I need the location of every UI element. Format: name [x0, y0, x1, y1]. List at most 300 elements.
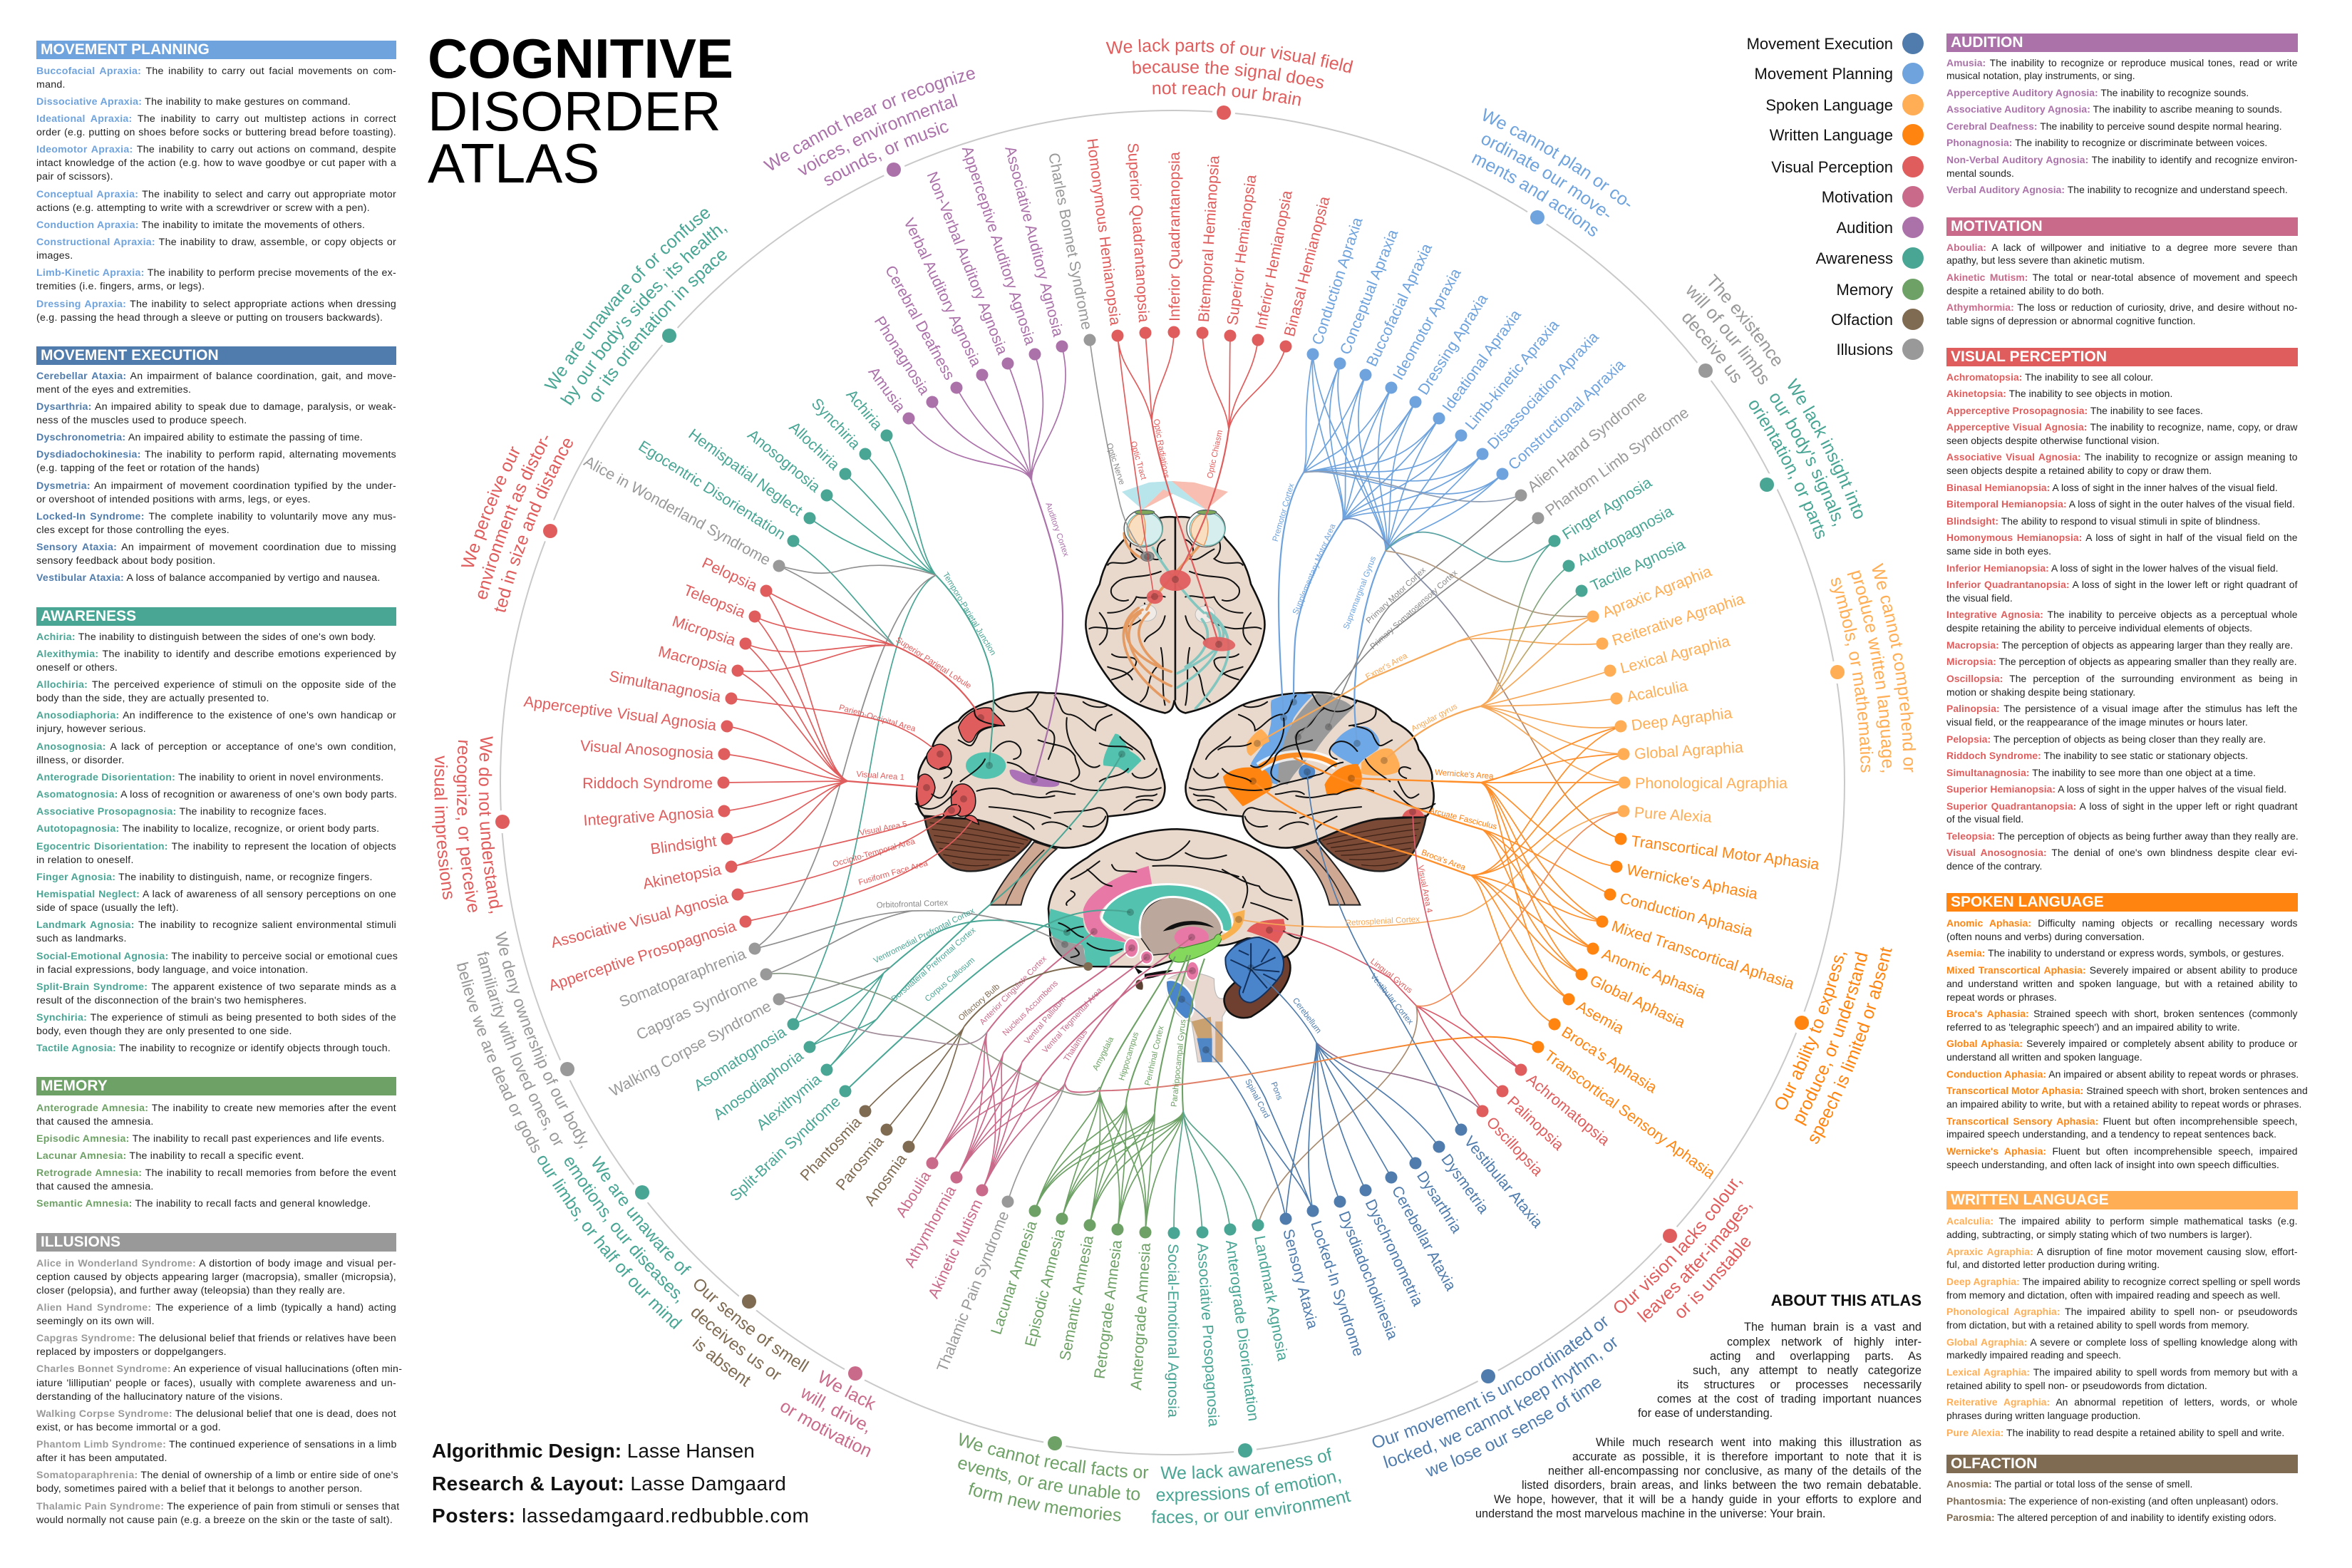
- panel: awareness: Split-Brain Syndrome: The apparent existence of two separate minds as a: [36, 981, 396, 993]
- about text block: complex network of highly inter-: [1727, 1336, 1922, 1348]
- panel: visual perception: same side in both eyes.: [1946, 545, 2051, 557]
- panel: visual perception: Homonymous Hemianopsia: A loss of sight in half of the visual field on the: [1946, 532, 2298, 543]
- panel: written language: Reiterative Agraphia: An abnormal repetition of letters, words, or whole: [1946, 1396, 2298, 1408]
- panel: motivation: Aboulia: A lack of willpower and initiative to a degree more severe than: [1946, 242, 2298, 253]
- statement: vision: or is unstable: [1676, 1237, 1750, 1318]
- panel: visual perception: Integrative Agnosia: The inability to perceive objects as a perceptual whole: [1946, 609, 2298, 620]
- statement: body insight: our body's signals,: [1770, 393, 1842, 526]
- disorder nodes: body agnosias: Autotopagnosia: [1574, 502, 1676, 569]
- disorder nodes: body agnosias: [1545, 474, 1688, 602]
- statement: written language: [1826, 562, 1919, 774]
- panel: audition: Associative Auditory Agnosia: The inability to ascribe meaning to sounds.: [1946, 103, 2282, 115]
- disorder nodes: delusions: Capgras Syndrome: [634, 971, 760, 1043]
- panel: memory: that caused the amnesia.: [36, 1181, 154, 1192]
- brain area labels: Ventral Tegmental Area: [1041, 986, 1104, 1055]
- statement: visual field: because the signal does: [1133, 61, 1324, 88]
- panel: written language: Global Agraphia: A severe or complete loss of spelling knowledge along with: [1946, 1336, 2297, 1348]
- panel: awareness: AWARENESS: [41, 608, 136, 624]
- statement: audition: sounds, or music: [820, 116, 951, 190]
- panel: audition: Phonagnosia: The inability to recognize or discriminate between voices.: [1946, 137, 2267, 148]
- disorder nodes: spatial awareness: Allochiria: [786, 418, 843, 473]
- panel: written language: WRITTEN LANGUAGE: [1951, 1192, 2109, 1208]
- disorder nodes: movement execution: [1275, 1120, 1546, 1358]
- panel: memory: MEMORY: [41, 1078, 108, 1094]
- brain area labels: Dorsolateral Prefrontal Cortex: [890, 926, 978, 1004]
- panel: movement execution: MOVEMENT EXECUTION: [41, 346, 219, 363]
- panel: illusions: Walking Corpse Syndrome: The delusional belief that one is dead, does not: [36, 1408, 396, 1420]
- brain area labels: Superior Parietal Lobule: [894, 636, 973, 691]
- panel: movement execution: Dysmetria: An impairment of movement coordination typified by the under-: [36, 480, 396, 492]
- panel: movement execution: ment of the eyes and extremities.: [36, 384, 191, 396]
- statement: awareness of emotion: expressions of emotion,: [1156, 1473, 1341, 1505]
- panel: awareness: Anosodiaphoria: An indifference to the existence of one's own handicap or: [36, 710, 396, 721]
- panel: memory: Lacunar Amnesia: The inability to recall a specific event.: [36, 1150, 304, 1162]
- panel: awareness: illness, or disorder.: [36, 755, 125, 766]
- panel: movement execution: [36, 346, 396, 589]
- panel: awareness: injury, however serious.: [36, 723, 146, 735]
- panel: audition: Apperceptive Auditory Agnosia: The inability to recognize sounds.: [1946, 87, 2249, 98]
- statement: delusions: familiarity with loved ones, or: [473, 949, 569, 1150]
- disorder nodes: left visual: Micropsia: [670, 612, 738, 649]
- brain area labels: [832, 418, 1498, 1120]
- legend: Motivation: [1822, 188, 1893, 206]
- brain area labels: Exner's Area: [1364, 651, 1409, 681]
- brain area labels: Optic Nerve: [1105, 442, 1126, 486]
- brain: lateral right: [1185, 692, 1435, 905]
- disorder nodes: apraxias: Constructional Apraxia: [1505, 356, 1629, 473]
- panel: awareness: body than the side, they are actually presented to.: [36, 693, 269, 704]
- brain area labels: Ventromedial Prefrontal Cortex: [872, 907, 976, 965]
- brain area labels: Visual Area 4: [1416, 865, 1433, 914]
- panel: audition: musical notation, play instruments, or sing.: [1946, 70, 2135, 81]
- statement: visual impressions: visual impressions: [430, 755, 459, 901]
- panel: awareness: in facial expressions, body language, and voice intonation.: [36, 964, 309, 976]
- panel: visual perception: motion or shaking despite being stationary.: [1946, 686, 2135, 698]
- disorder nodes: written language: Acalculia: [1626, 677, 1689, 706]
- brain area labels: Parahippocampal Gyrus: [1170, 1018, 1187, 1108]
- statement: awareness of emotion: We lack awareness of: [1160, 1448, 1331, 1480]
- credits: Algorithmic Design: Lasse Hansen: [432, 1440, 755, 1462]
- statement: memory: events, or are unable to: [958, 1460, 1140, 1500]
- disorder nodes: motivation: Athymhormia: [901, 1183, 959, 1270]
- panel: audition: Cerebral Deafness: The inability to perceive sound despite normal hearing.: [1946, 120, 2282, 132]
- disorder nodes: apraxias: Ideational Apraxia: [1439, 306, 1525, 416]
- statement: body insight: orientation, or parts: [1749, 401, 1825, 539]
- legend: Written Language: [1770, 126, 1893, 144]
- panel: audition: AUDITION: [1951, 34, 2023, 50]
- statement: motivation: We lack: [814, 1367, 879, 1414]
- disorder nodes: emotional awareness: [691, 1014, 856, 1205]
- disorder nodes: body agnosias: Tactile Agnosia: [1588, 536, 1688, 594]
- disorder nodes: lower awareness: [1165, 1218, 1291, 1427]
- legend: Audition: [1836, 219, 1893, 237]
- panel: memory: Semantic Amnesia: The inability to recall facts and general knowledge.: [36, 1198, 371, 1209]
- disorder nodes: written language: Reiterative Agraphia: [1610, 590, 1746, 649]
- disorder nodes: left visual: Associative Visual Agnosia: [549, 889, 730, 951]
- statement: movement execution: Our movement is uncoordinated or: [1373, 1316, 1608, 1448]
- legend: Awareness: [1816, 249, 1893, 267]
- panel: movement execution: Dyschronometria: An impaired ability to estimate the passing of time.: [36, 432, 363, 443]
- statement: written language: produce written language,: [1847, 570, 1892, 773]
- panel: motivation: apathy, but less severe than akinetic mutism.: [1946, 254, 2145, 266]
- brain area labels: Nucleus Accumbens: [1001, 979, 1060, 1038]
- panel: awareness: Hemispatial Neglect: A lack of awareness of all sensory perceptions on one: [36, 889, 396, 900]
- link bundle: illusions upper right: [1298, 472, 1621, 839]
- panel: audition: Non-Verbal Auditory Agnosia: The inability to identify and recognize environ-: [1946, 154, 2298, 165]
- panel: visual perception: Visual Anosognosia: The denial of one's own blindness despite clear evi-: [1946, 847, 2298, 858]
- panel: memory: Anterograde Amnesia: The inability to create new memories after the event: [36, 1102, 396, 1113]
- panel: written language: Lexical Agraphia: The impaired ability to spell words from memory but with a: [1946, 1366, 2297, 1378]
- panel: awareness: Autotopagnosia: The inability to localize, recognize, or orient body parts.: [36, 823, 379, 835]
- panel: spoken language: impaired speech understanding, and a tendency to repeat sentences back.: [1946, 1128, 2276, 1140]
- brain area labels: Lingual Gyrus: [1368, 957, 1414, 995]
- panel: illusions: derstanding of the hallucinatory nature of the visions.: [36, 1391, 283, 1403]
- panel: spoken language: an impaired ability to write, but with a retained ability to repeat words or phrases.: [1946, 1098, 2301, 1110]
- disorder nodes: delusions: [607, 939, 789, 1100]
- panel: visual perception: visual field, or the reappearance of the image minutes or hours later.: [1946, 716, 2248, 728]
- panel: awareness: Achiria: The inability to distinguish between the sides of one's own body.: [36, 631, 376, 643]
- statement: olfaction: deceives us or: [687, 1302, 785, 1385]
- brain area labels: Spinal Cord: [1243, 1078, 1271, 1120]
- brain area labels: Supramarginal Gyrus: [1342, 555, 1378, 631]
- title: [428, 27, 733, 195]
- legend: Spoken Language: [1765, 96, 1893, 114]
- panel: memory: [36, 1077, 396, 1215]
- disorder nodes: audition: Verbal Auditory Agnosia: [900, 215, 985, 369]
- brain area labels: Thalamus: [1063, 1028, 1089, 1063]
- panel: movement planning: order (e.g. putting on shoes before socks or buttering bread before toasting).: [36, 127, 396, 138]
- brain area labels: Fusiform Face Area: [857, 859, 929, 887]
- statement: vision: Our vision lacks colour,: [1614, 1179, 1743, 1313]
- outer ring category dots: [495, 105, 1845, 1458]
- statement: distorted perception: ted in size and distance: [490, 433, 578, 614]
- disorder nodes: memory: Retrograde Amnesia: [1091, 1239, 1125, 1380]
- title: COGNITIVE: [428, 27, 733, 90]
- panel: spoken language: Mixed Transcortical Aphasia: Severely impaired or absent ability to produce: [1946, 964, 2298, 976]
- disorder nodes: visual field: Homonymous Hemianopsia: [1083, 138, 1124, 326]
- disorder nodes: olfaction: [797, 1101, 920, 1209]
- panel: spoken language: SPOKEN LANGUAGE: [1951, 894, 2104, 910]
- disorder nodes: lower awareness: Associative Prosopagnosia: [1194, 1242, 1222, 1427]
- disorder nodes: written language: Phonological Agraphia: [1635, 775, 1788, 792]
- legend: Movement Planning: [1755, 65, 1893, 83]
- statement: audition: voices, environmental: [794, 91, 960, 180]
- panel: awareness: Anosognosia: A lack of perception or acceptance of one's own condition,: [36, 741, 396, 753]
- panel: visual perception: Bitemporal Hemianopsia: A loss of sight in the outer halves of the visual field.: [1946, 498, 2295, 510]
- disorder nodes: audition: Cerebral Deafness: [882, 262, 958, 383]
- about text block: neither all-encompassing nor conclusive, as many of the details of the: [1548, 1465, 1922, 1477]
- legend: Movement Execution: [1747, 35, 1893, 53]
- brain area labels: Primary Somatosensory Cortex: [1369, 569, 1460, 651]
- panel: awareness: Allochiria: The perceived experience of stimuli on the opposite side of the: [36, 679, 396, 691]
- about text block: While much research went into making this illustration as: [1596, 1436, 1922, 1449]
- panel: movement planning: pair of scissors).: [36, 171, 113, 182]
- about text block: [1475, 1319, 1922, 1525]
- panel: visual perception: Pelopsia: The perception of objects as being closer than they really are.: [1946, 733, 2266, 744]
- statement: body insight: We lack insight into: [1788, 378, 1863, 519]
- link bundle: awareness: [793, 435, 1130, 1091]
- link bundle: movement planning: [1279, 354, 1502, 743]
- disorder nodes: spatial awareness: Egocentric Disorientation: [636, 438, 788, 543]
- panel: memory: Retrograde Amnesia: The inability to recall memories from before the event: [36, 1167, 396, 1179]
- panel: spoken language: speech understanding, and often lack of insight into own speech difficulties.: [1946, 1159, 2279, 1170]
- panel: audition: Verbal Auditory Agnosia: The inability to recognize and understand speech.: [1946, 184, 2288, 195]
- statement: visual field: [1105, 36, 1355, 110]
- panel: movement planning: Dissociative Apraxia: The inability to make gestures on command.: [36, 96, 351, 108]
- panel: illusions: ception caused by objects appearing larger (macropsia), smaller (micropsia),: [36, 1272, 396, 1283]
- disorder nodes: left visual: Integrative Agnosia: [583, 804, 714, 829]
- brain area labels: Angular gyrus: [1410, 702, 1459, 733]
- statement: visual impressions: We do not understand,: [475, 736, 507, 916]
- panel: movement planning: MOVEMENT PLANNING: [41, 41, 210, 57]
- panel: movement execution: Dysarthria: An impaired ability to speak due to damage, paralysis, or weak-: [36, 401, 396, 413]
- credits: Research & Layout: Lasse Damgaard: [432, 1472, 786, 1495]
- panel: movement planning: Constructional Apraxia: The inability to draw, assemble, or copy objects or: [36, 237, 396, 248]
- panel: illusions: Thalamic Pain Syndrome: The experience of pain from stimuli or senses that: [36, 1501, 399, 1512]
- statement: emotional awareness: We are unaware of: [587, 1154, 693, 1279]
- brain area labels: Premotor Cortex: [1272, 483, 1296, 542]
- disorder nodes: spoken language: Conduction Aphasia: [1618, 889, 1755, 940]
- panel: olfaction: Parosmia: The altered perception of and inability to identify existing odors.: [1946, 1512, 2276, 1523]
- panel: awareness: Landmark Agnosia: The inability to recognize salient environmental stimuli: [36, 919, 396, 931]
- panel: visual perception: of the visual field.: [1946, 813, 2023, 825]
- disorder nodes: body agnosias: Finger Agnosia: [1559, 474, 1655, 543]
- panel: visual perception: seen objects despite otherwise functional vision.: [1946, 435, 2160, 446]
- panel: spoken language: Anomic Aphasia: Difficulty naming objects or recalling necessary words: [1946, 917, 2298, 929]
- panel: spoken language: repeat words or phrases.: [1946, 991, 2057, 1003]
- panel: awareness: [36, 607, 396, 1060]
- disorder nodes: movement execution: Dysdiadochokinesia: [1335, 1209, 1401, 1342]
- panel: visual perception: Riddoch Syndrome: The inability to see static or stationary objects.: [1946, 750, 2248, 761]
- panel: movement planning: Dressing Apraxia: The inability to select appropriate actions when dressing: [36, 299, 396, 310]
- disorder nodes: spatial awareness: Achiria: [843, 386, 886, 433]
- brain area labels: Olfactory Bulb: [957, 983, 1001, 1023]
- brain: lateral left: [915, 692, 1165, 905]
- disorder nodes: visual field: Inferior Hemianopsia: [1252, 189, 1296, 331]
- brain area labels: Visual Area 1: [856, 770, 904, 782]
- disorder nodes: written language: Deep Agraphia: [1631, 704, 1733, 734]
- panel: illusions: ILLUSIONS: [41, 1234, 120, 1250]
- panel: movement planning: Conceptual Apraxia: The inability to select and carry out appropriate motor: [36, 189, 396, 200]
- panel: spoken language: Conduction Aphasia: An impaired or absent ability to repeat words or phrases.: [1946, 1068, 2299, 1080]
- disorder nodes: spoken language: Mixed Transcortical Aphasia: [1609, 917, 1796, 993]
- panel: spoken language: (often nouns and verbs) during conversation.: [1946, 931, 2145, 942]
- statement: body sides: by our body's sides, its health,: [557, 217, 731, 408]
- disorder nodes: lower awareness: Anterograde Disorientation: [1222, 1239, 1262, 1422]
- panel: visual perception: Teleopsia: The perception of objects as being further away than they really are.: [1946, 830, 2299, 842]
- panel: illusions: would normally not cause pain (e.g. a breeze on the skin or the taste of salt).: [36, 1515, 393, 1526]
- panel: visual perception: dence of the contrary.: [1946, 860, 2042, 872]
- disorder nodes: movement execution: Dyschronometria: [1362, 1197, 1427, 1309]
- panel: awareness: Synchiria: The experience of stimuli as being presented to both sides of the: [36, 1012, 396, 1023]
- legend: [1747, 33, 1924, 360]
- disorder nodes: left visual: Teleopsia: [681, 582, 748, 621]
- brain area labels: Amygdala: [1091, 1036, 1116, 1072]
- panel: illusions: closer (pelopsia), and further away (teleopsia) than they really are.: [36, 1285, 346, 1296]
- credits: [432, 1440, 810, 1527]
- panel: audition: mental sounds.: [1946, 167, 2014, 179]
- panel: visual perception: despite retaining the ability to perceive individual elements of objects.: [1946, 622, 2252, 634]
- panel: movement execution: ness of the muscles used to produce speech.: [36, 415, 247, 426]
- disorder nodes: olfaction: Anosmia: [861, 1151, 910, 1209]
- statement: movement execution: locked, we cannot keep rhythm, or: [1383, 1337, 1617, 1468]
- disorder nodes: movement execution: Sensory Ataxia: [1279, 1227, 1321, 1331]
- panel: memory: Episodic Amnesia: The inability to recall past experiences and life events.: [36, 1133, 385, 1145]
- panel: movement execution: sensory feedback about body position.: [36, 555, 215, 567]
- panel: olfaction: Anosmia: The partial or total loss of the sense of smell.: [1946, 1478, 2192, 1490]
- panel: olfaction: OLFACTION: [1951, 1455, 2037, 1472]
- panel: motivation: Athymhormia: The loss or reduction of curiosity, drive, and desire without no-: [1946, 301, 2298, 313]
- panel: audition: [1946, 33, 2298, 200]
- statement: emotional awareness: our limbs, or half of our mind: [532, 1151, 685, 1334]
- brain area labels: Anterior Cingulate Cortex: [979, 954, 1048, 1027]
- statement: motivation: [776, 1367, 879, 1462]
- panel: awareness: Tactile Agnosia: The inability to recognize or identify objects through touch.: [36, 1043, 391, 1054]
- panel: visual perception: Blindsight: The ability to respond to visual stimuli in spite of blindness.: [1946, 515, 2260, 527]
- disorder nodes: memory: Semantic Amnesia: [1056, 1234, 1097, 1362]
- panel: awareness: side of space (usually the left).: [36, 902, 179, 914]
- panel: visual perception: Inferior Quadrantanopsia: A loss of sight in the lower left or right quadrant of: [1946, 579, 2298, 590]
- credits: Posters: lassedamgaard.redbubble.com: [432, 1505, 810, 1527]
- disorder nodes: written language: Global Agraphia: [1634, 738, 1744, 763]
- brain area labels: Ventral Pallidum: [1023, 995, 1068, 1046]
- about text block: comes at the cost of trading important nuances: [1657, 1393, 1922, 1405]
- disorder nodes: written language: Pure Alexia: [1634, 804, 1712, 826]
- statement: movement execution: we lose our sense of time: [1425, 1378, 1601, 1477]
- disorder nodes: delusions: Somatoparaphrenia: [617, 945, 748, 1011]
- disorder nodes: movement execution: Locked-In Syndrome: [1307, 1219, 1367, 1358]
- panel: visual perception: Inferior Hemianopsia: A loss of sight in the lower halves of the visual field.: [1946, 562, 2279, 574]
- disorder nodes: apraxias: [1304, 215, 1629, 485]
- disorder nodes: apraxias: Conduction Apraxia: [1309, 215, 1366, 347]
- statement: delusions: We deny ownership of our body,: [492, 930, 595, 1151]
- legend: Olfaction: [1831, 311, 1893, 329]
- disorder nodes: memory: Lacunar Amnesia: [988, 1219, 1041, 1336]
- disorder nodes: visual field: Binasal Hemianopsia: [1281, 195, 1334, 339]
- panel: illusions: Charles Bonnet Syndrome: An experience of visual hallucinations (often min-: [36, 1363, 402, 1375]
- panel: illusions: exist, or has become immortal or a god.: [36, 1422, 221, 1433]
- panel: illusions: Capgras Syndrome: The delusional belief that friends or relatives have been: [36, 1333, 396, 1344]
- disorder nodes: left visual: Apperceptive Visual Agnosia: [523, 693, 718, 734]
- disorder nodes: left visual: Akinetopsia: [641, 861, 723, 892]
- statement: visual field: not reach our brain: [1152, 83, 1301, 106]
- statement: movement planning: We cannot plan or co-: [1483, 108, 1631, 207]
- title: DISORDER: [428, 80, 721, 143]
- panel: movement planning: images.: [36, 250, 73, 262]
- disorder nodes: left visual: Visual Anosognosia: [579, 737, 714, 763]
- panel: visual perception: Akinetopsia: The inability to see objects in motion.: [1946, 388, 2172, 399]
- link bundle: illusions lower left: [755, 565, 1100, 1095]
- disorder nodes: movement execution: Cerebellar Ataxia: [1388, 1183, 1460, 1294]
- brain area labels: Primary Motor Cortex: [1365, 566, 1428, 625]
- disorder nodes: left visual: [523, 555, 775, 994]
- disorder nodes: audition: Non-Verbal Auditory Agnosia: [924, 170, 1011, 357]
- disorder nodes: lower awareness: Landmark Agnosia: [1251, 1234, 1291, 1362]
- link bundle: visual perception left: [723, 591, 981, 922]
- brain area labels: Vestibular Cortex: [1368, 972, 1415, 1026]
- panel: visual perception: Associative Visual Agnosia: The inability to recognize or assign meaning to: [1946, 451, 2298, 463]
- disorder nodes: apraxias: Limb-kinetic Apraxia: [1462, 316, 1562, 433]
- disorder node: Charles Bonnet: Charles Bonnet Syndrome: [1045, 151, 1095, 331]
- panel: illusions: replaced by imposters or doppelgangers.: [36, 1346, 227, 1358]
- panel: movement execution: Vestibular Ataxia: A loss of balance accompanied by vertigo and nausea.: [36, 572, 381, 584]
- link bundle: memory: [1035, 955, 1258, 1233]
- panel: movement planning: mand.: [36, 79, 66, 91]
- panel: awareness: body, even though they are only presented to one side.: [36, 1026, 292, 1037]
- disorder nodes: motivation: [892, 1154, 993, 1301]
- panel: audition: Amusia: The inability to recognize or reproduce musical tones, read or write: [1946, 57, 2298, 68]
- panel: illusions: after it has been amputated.: [36, 1453, 167, 1464]
- disorder nodes: left visual: Riddoch Syndrome: [582, 775, 713, 792]
- statement: illusions of limbs: The existence: [1708, 274, 1780, 366]
- statement: illusions of limbs: will of our limbs: [1686, 285, 1768, 385]
- statement: spoken language: speech is limited or absent: [1810, 947, 1892, 1144]
- panel: awareness: Egocentric Disorientation: The inability to represent the location of objects: [36, 841, 396, 852]
- brain area labels: Optic Chiasm: [1206, 429, 1224, 479]
- disorder nodes: movement execution: Dysarthria: [1413, 1168, 1465, 1236]
- disorder nodes: spoken language: Asemia: [1574, 998, 1626, 1037]
- disorder nodes: lower right visual: [1472, 1060, 1613, 1180]
- panel: written language: from memory and dictation, often with impaired reading and speech as well.: [1946, 1289, 2281, 1301]
- panel: visual perception: Superior Quadrantanopsia: A loss of sight in the upper left or right quadrant: [1946, 800, 2298, 811]
- disorder nodes: memory: Episodic Amnesia: [1021, 1227, 1068, 1348]
- panel: spoken language: Wernicke's Aphasia: Fluent but often incomprehensible speech, impaired: [1946, 1145, 2298, 1157]
- region anchors: [923, 553, 1416, 1053]
- panel: visual perception: Palinopsia: The persistence of a visual image after the stimulus has left the: [1946, 703, 2298, 714]
- about text block: such, any attempt to neatly categorize: [1693, 1364, 1922, 1377]
- disorder nodes: spatial awareness: Anosognosia: [744, 426, 823, 495]
- panel: visual perception: Micropsia: The perception of objects as appearing smaller than they really are.: [1946, 656, 2297, 667]
- disorder nodes: audition: Apperceptive Auditory Agnosia: [959, 144, 1039, 347]
- panel: movement execution: Dysdiadochokinesia: The inability to perform rapid, alternating movements: [36, 449, 396, 460]
- about text block: for ease of understanding.: [1638, 1407, 1773, 1420]
- disorder nodes: spatial awareness: Hemispatial Neglect: [686, 425, 805, 520]
- about text block: acting and overlapping parts. As: [1710, 1350, 1922, 1363]
- statement: visual field: We lack parts of our visual field: [1106, 38, 1353, 73]
- disorder nodes: audition: Amusia: [865, 363, 909, 416]
- panel: awareness: result of the disconnection of the brain's two hemispheres.: [36, 995, 306, 1006]
- disorder nodes: written language: Lexical Agraphia: [1619, 632, 1732, 677]
- panel: movement planning: tremities (i.e. fingers, arms, or legs).: [36, 281, 205, 292]
- panel: olfaction: [1946, 1455, 2298, 1528]
- statement: motivation: or motivation: [776, 1396, 875, 1462]
- statement: body sides: We are unaware of or confuse: [541, 202, 715, 394]
- brain area labels: Supplementary Motor Area: [1291, 522, 1338, 616]
- panel: movement planning: Ideomotor Apraxia: The inability to carry out actions on command, despite: [36, 144, 396, 155]
- disorder nodes: visual field: Bitemporal Hemianopsia: [1195, 155, 1223, 323]
- panel: movement planning: Conduction Apraxia: The inability to imitate the movements of others.: [36, 220, 365, 231]
- panel: motivation: despite a retained ability to do both.: [1946, 285, 2104, 296]
- panel: written language: retained ability to spell non- or pseudowords from dictation.: [1946, 1380, 2207, 1391]
- panel: memory: that caused the amnesia.: [36, 1116, 154, 1128]
- disorder nodes: memory: Anterograde Amnesia: [1128, 1242, 1154, 1391]
- disorder nodes: written language: Apraxic Agraphia: [1600, 562, 1714, 621]
- panel: movement execution: Locked-In Syndrome: The complete inability to voluntarily move any mus-: [36, 511, 396, 522]
- brain area labels: Arcuate Fasciculus: [1428, 807, 1498, 832]
- disorder nodes: emotional awareness: Split-Brain Syndrome: [726, 1093, 844, 1205]
- statement: written language: We cannot comprehend or: [1872, 563, 1916, 773]
- statement: distorted perception: We perceive our: [458, 443, 525, 572]
- panel: written language: [1946, 1191, 2298, 1443]
- brain area labels: Cerebellum: [1291, 996, 1323, 1035]
- statement: body sides: or its orientation in space: [584, 244, 731, 406]
- statement: awareness of emotion: [1151, 1445, 1353, 1527]
- statement: delusions: believe we are dead or gods: [453, 960, 547, 1156]
- disorder nodes: upper right illusions: [1511, 388, 1692, 530]
- panel: visual perception: Oscillopsia: The perception of the surrounding environment as being in: [1946, 673, 2298, 684]
- disorder nodes: upper right illusions: Alien Hand Syndrome: [1525, 388, 1650, 495]
- panel: visual perception: seen objects despite a retained ability to copy or draw them.: [1946, 465, 2212, 476]
